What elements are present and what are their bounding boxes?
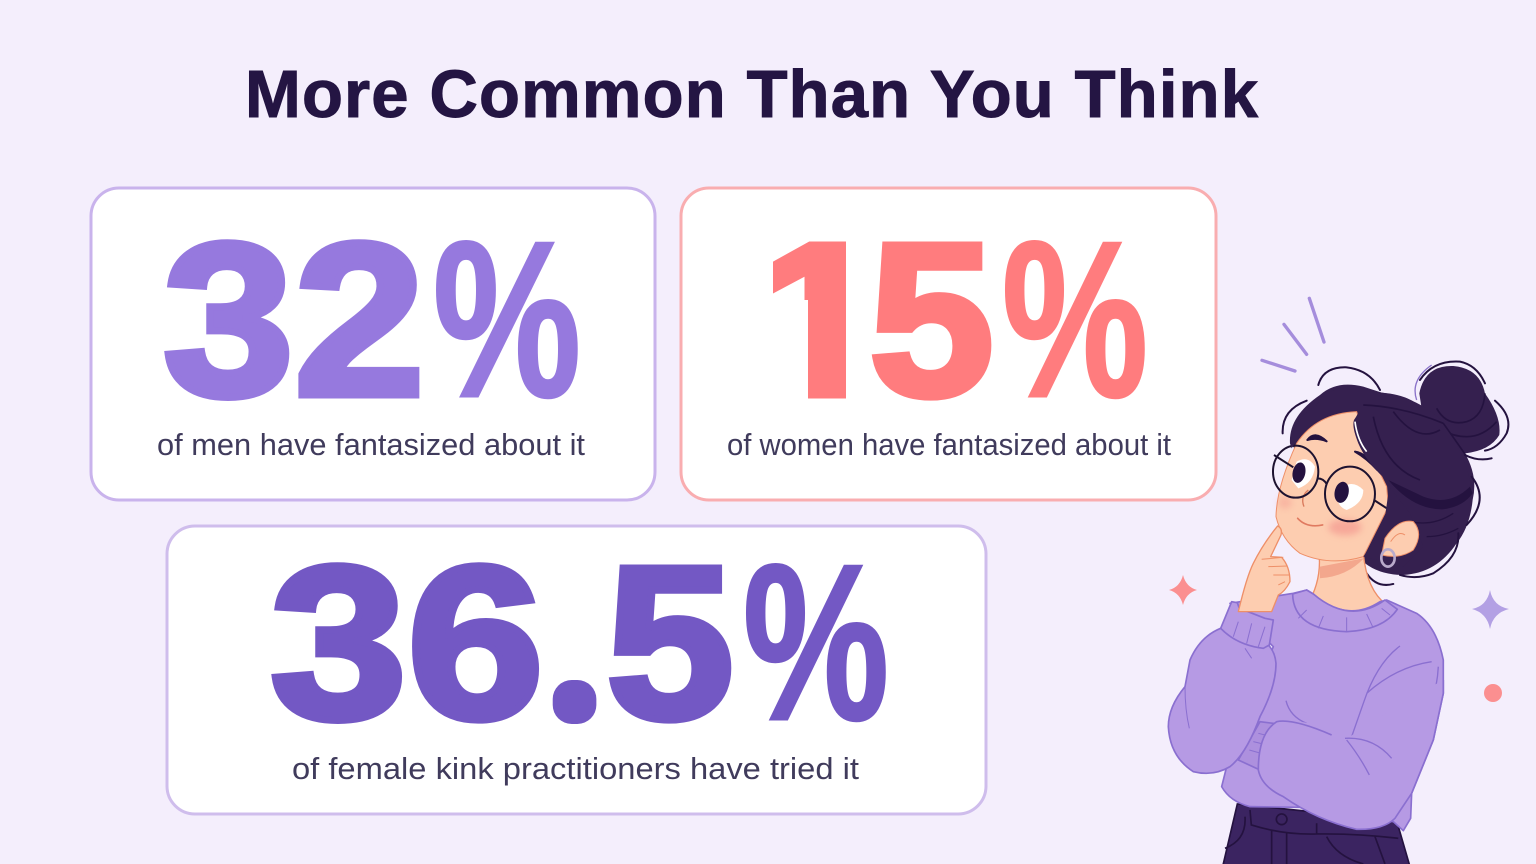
- panel: women stat: [681, 188, 1216, 500]
- caption: of women have fantasized about it: [727, 427, 1171, 462]
- caption: of female kink practitioners have tried it: [292, 751, 859, 786]
- icon: pink sparkle: [1169, 575, 1197, 605]
- cuff: [1221, 602, 1273, 648]
- torso: [1222, 590, 1443, 831]
- panel: men stat: [91, 188, 655, 500]
- hand with pointing finger: [1238, 526, 1290, 612]
- stat: 15%: [773, 240, 1145, 401]
- stat: 36.5%: [270, 519, 889, 767]
- card outline: [91, 188, 655, 500]
- icon: pink dot: [1484, 684, 1502, 702]
- title: More Common Than You Think: [245, 57, 1259, 132]
- card outline: [167, 526, 986, 814]
- stat: 36.5%: 36: [270, 522, 544, 765]
- card outline: [681, 188, 1216, 500]
- glasses frames: [1273, 446, 1388, 521]
- smile: [1298, 518, 1323, 526]
- collar: [1293, 590, 1397, 632]
- pupils: [1291, 461, 1307, 484]
- neck: [1310, 553, 1387, 627]
- eye whites: [1292, 459, 1315, 488]
- forearm: [1258, 680, 1443, 829]
- cheek blush: [1328, 519, 1362, 535]
- raised arm: [1168, 628, 1276, 773]
- back hair and bun: [1283, 362, 1508, 585]
- panel: female practitioners stat: [167, 519, 986, 814]
- stat: 32%: [163, 196, 581, 444]
- stat: 15%: %: [1002, 196, 1148, 444]
- face: [1276, 412, 1388, 561]
- ear and earring: [1381, 521, 1419, 567]
- far sleeve folds: [1286, 646, 1438, 744]
- stat: 36.5%: .: [569, 670, 580, 714]
- stat: 15%: 5: [869, 199, 994, 442]
- eyes and glasses: [1273, 435, 1388, 521]
- stat: 15%: 1: [749, 199, 891, 442]
- icon: purple sparkle: [1472, 590, 1509, 629]
- stat: 36.5%: %: [743, 519, 889, 767]
- inner cuff: [1238, 722, 1278, 770]
- icon: thought rays: [1262, 298, 1324, 371]
- caption: of men have fantasized about it: [157, 427, 585, 462]
- eyebrows: [1307, 435, 1377, 470]
- stat: 32%: %: [433, 196, 581, 444]
- front hair: [1290, 387, 1473, 567]
- stat: 32%: 32: [163, 199, 425, 442]
- illustration: thinking woman: [1168, 362, 1508, 864]
- nose: [1303, 490, 1308, 507]
- stat: 36.5%: 5: [606, 522, 734, 765]
- jeans: [1223, 804, 1410, 864]
- sweater: [1168, 590, 1443, 831]
